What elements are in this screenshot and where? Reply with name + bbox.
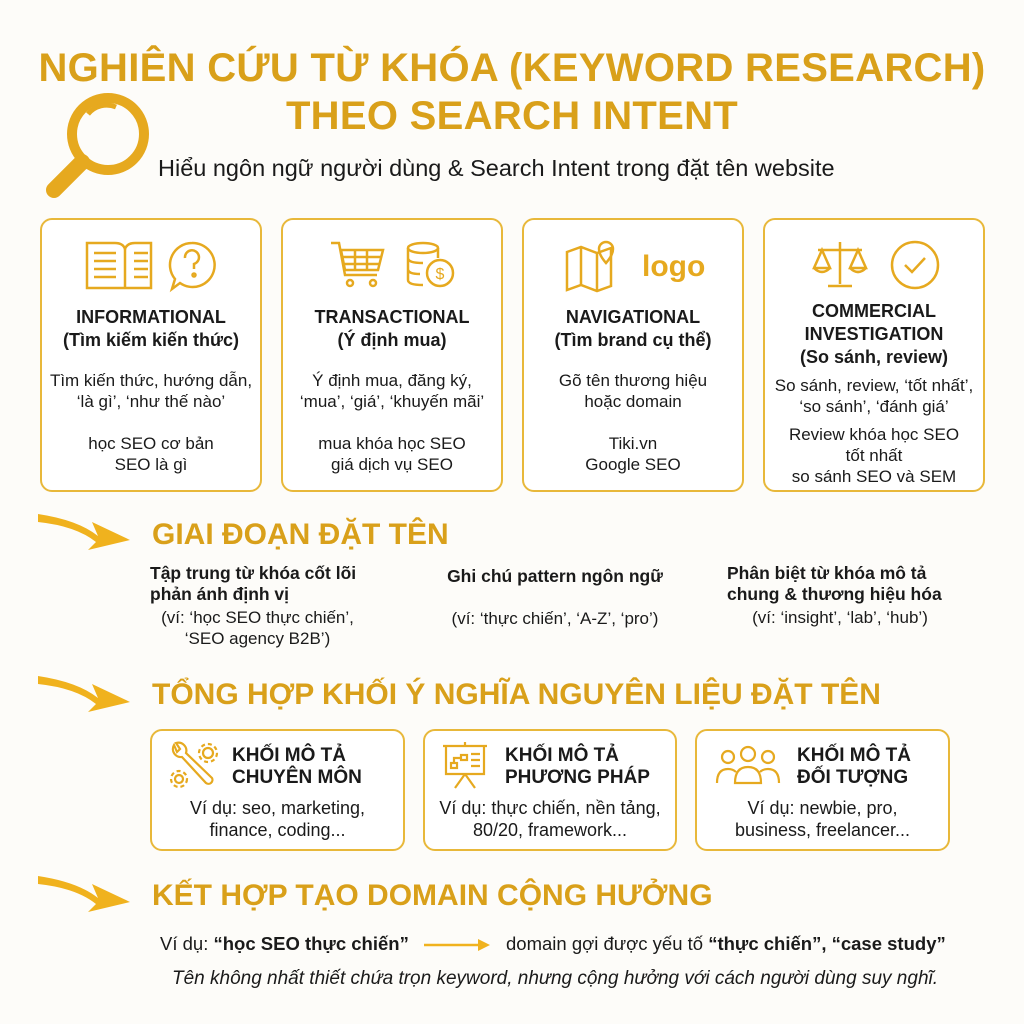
subtitle: Hiểu ngôn ngữ người dùng & Search Intent trong đặt tên website — [158, 155, 835, 181]
icon: magnifier — [46, 93, 149, 198]
panel: navigational: hoặc domain — [584, 392, 682, 411]
panel: doi tuong: ĐỐI TƯỢNG — [797, 767, 908, 788]
icon: people — [716, 746, 780, 784]
text block: column 2: (ví: ‘thực chiến’, ‘A-Z’, ‘pro’) — [452, 609, 658, 628]
panel: informational: (Tìm kiếm kiến thức) — [63, 330, 239, 350]
text block: column 1: ‘SEO agency B2B’) — [185, 629, 330, 648]
panel: navigational: Gõ tên thương hiệu — [559, 371, 707, 390]
panel: phuong phap: KHỐI MÔ TẢ — [505, 745, 619, 766]
panel: transactional: giá dịch vụ SEO — [331, 455, 453, 474]
panel: informational: ‘là gì’, ‘như thế nào’ — [77, 392, 225, 411]
title: THEO SEARCH INTENT — [286, 94, 738, 138]
text block: column 3: Phân biệt từ khóa mô tả — [727, 563, 926, 583]
title — [38, 45, 986, 138]
panel: chuyen mon — [150, 729, 405, 851]
panel: navigational: NAVIGATIONAL — [566, 307, 700, 327]
panel: commercial investigation: so sánh SEO và SEM — [792, 467, 956, 486]
text block: note: Tên không nhất thiết chứa trọn keyword, nhưng cộng hưởng với cách người dùng suy nghĩ. — [172, 968, 938, 989]
icon: scales and check — [812, 240, 940, 290]
panel: transactional: Ý định mua, đăng ký, — [312, 371, 472, 390]
panel: phuong phap: Ví dụ: thực chiến, nền tảng, — [439, 798, 661, 818]
panel: commercial investigation: So sánh, review, ‘tốt nhất’, — [775, 376, 973, 395]
text block: column 2: Ghi chú pattern ngôn ngữ — [447, 566, 663, 586]
panel: transactional — [281, 218, 503, 492]
panel: doi tuong: Ví dụ: newbie, pro, — [747, 798, 898, 818]
title: NGHIÊN CỨU TỪ KHÓA (KEYWORD RESEARCH) — [38, 46, 986, 90]
text block: column 1: (ví: ‘học SEO thực chiến’, — [161, 608, 354, 627]
panel: informational: SEO là gì — [115, 455, 187, 474]
panel: phuong phap: PHƯƠNG PHÁP — [505, 767, 650, 788]
panel: commercial investigation: Review khóa học SEO — [789, 425, 959, 444]
text block: column 3 — [727, 563, 942, 627]
panel: navigational: (Tìm brand cụ thể) — [554, 330, 712, 350]
heading: tong hop khoi y nghia: TỔNG HỢP KHỐI Ý NGHĨA NGUYÊN LIỆU ĐẶT TÊN — [152, 678, 881, 711]
panel: commercial investigation: tốt nhất — [846, 446, 902, 465]
heading: ket hop tao domain: KẾT HỢP TẠO DOMAIN CỘNG HƯỞNG — [152, 879, 713, 912]
text block: column 1: Tập trung từ khóa cốt lõi — [150, 563, 356, 583]
icon: cart and coins — [331, 242, 454, 288]
panel: commercial investigation: (So sánh, review) — [800, 347, 948, 367]
icon: presentation — [443, 742, 487, 789]
icon: map and logo — [566, 240, 705, 292]
arrow: example — [424, 939, 490, 951]
panel: informational: học SEO cơ bản — [88, 434, 214, 453]
panel: navigational — [522, 218, 744, 492]
text block: column 1 — [150, 563, 356, 648]
text block: column 3: (ví: ‘insight’, ‘lab’, ‘hub’) — [752, 608, 928, 627]
panel: commercial investigation: COMMERCIAL — [812, 301, 936, 321]
panel: chuyen mon: finance, coding... — [209, 820, 346, 840]
icon: cart and coins: $ — [436, 266, 445, 283]
text block: example: Ví dụ: “học SEO thực chiến” — [160, 933, 409, 954]
panel: navigational: Tiki.vn — [609, 434, 657, 453]
panel: commercial investigation: ‘so sánh’, ‘đánh giá’ — [799, 397, 949, 416]
arrow: section 4 — [38, 876, 130, 912]
panel: commercial investigation: INVESTIGATION — [805, 324, 943, 344]
panel: informational — [40, 218, 262, 492]
arrow: section 2 — [38, 514, 130, 550]
panel: phuong phap: 80/20, framework... — [473, 820, 627, 840]
arrow: section 3 — [38, 676, 130, 712]
heading: giai doan dat ten: GIAI ĐOẠN ĐẶT TÊN — [152, 518, 449, 551]
text block: column 1: phản ánh định vị — [150, 584, 289, 604]
text block: domain result: domain gợi được yếu tố “thực chiến”, “case study” — [506, 933, 946, 954]
panel: chuyen mon: KHỐI MÔ TẢ — [232, 745, 346, 766]
panel: informational: INFORMATIONAL — [76, 307, 226, 327]
panel: transactional: (Ý định mua) — [338, 330, 446, 350]
panel: transactional: ‘mua’, ‘giá’, ‘khuyến mãi’ — [300, 392, 484, 411]
panel: chuyen mon: Ví dụ: seo, marketing, — [190, 798, 365, 818]
panel: phuong phap — [423, 729, 677, 851]
panel: navigational: Google SEO — [585, 455, 681, 474]
icon: book and question — [86, 242, 216, 292]
panel: commercial investigation — [763, 218, 985, 492]
panel: doi tuong: KHỐI MÔ TẢ — [797, 745, 911, 766]
panel: transactional: TRANSACTIONAL — [314, 307, 470, 327]
panel: doi tuong — [695, 729, 950, 851]
panel: informational: Tìm kiến thức, hướng dẫn, — [50, 371, 252, 390]
icon: map and logo: logo — [642, 250, 705, 283]
text block: column 2 — [447, 566, 663, 628]
icon: tools — [170, 742, 218, 788]
panel: doi tuong: business, freelancer... — [735, 820, 910, 840]
panel: transactional: mua khóa học SEO — [318, 434, 466, 453]
panel: chuyen mon: CHUYÊN MÔN — [232, 767, 362, 788]
text block: column 3: chung & thương hiệu hóa — [727, 584, 942, 604]
